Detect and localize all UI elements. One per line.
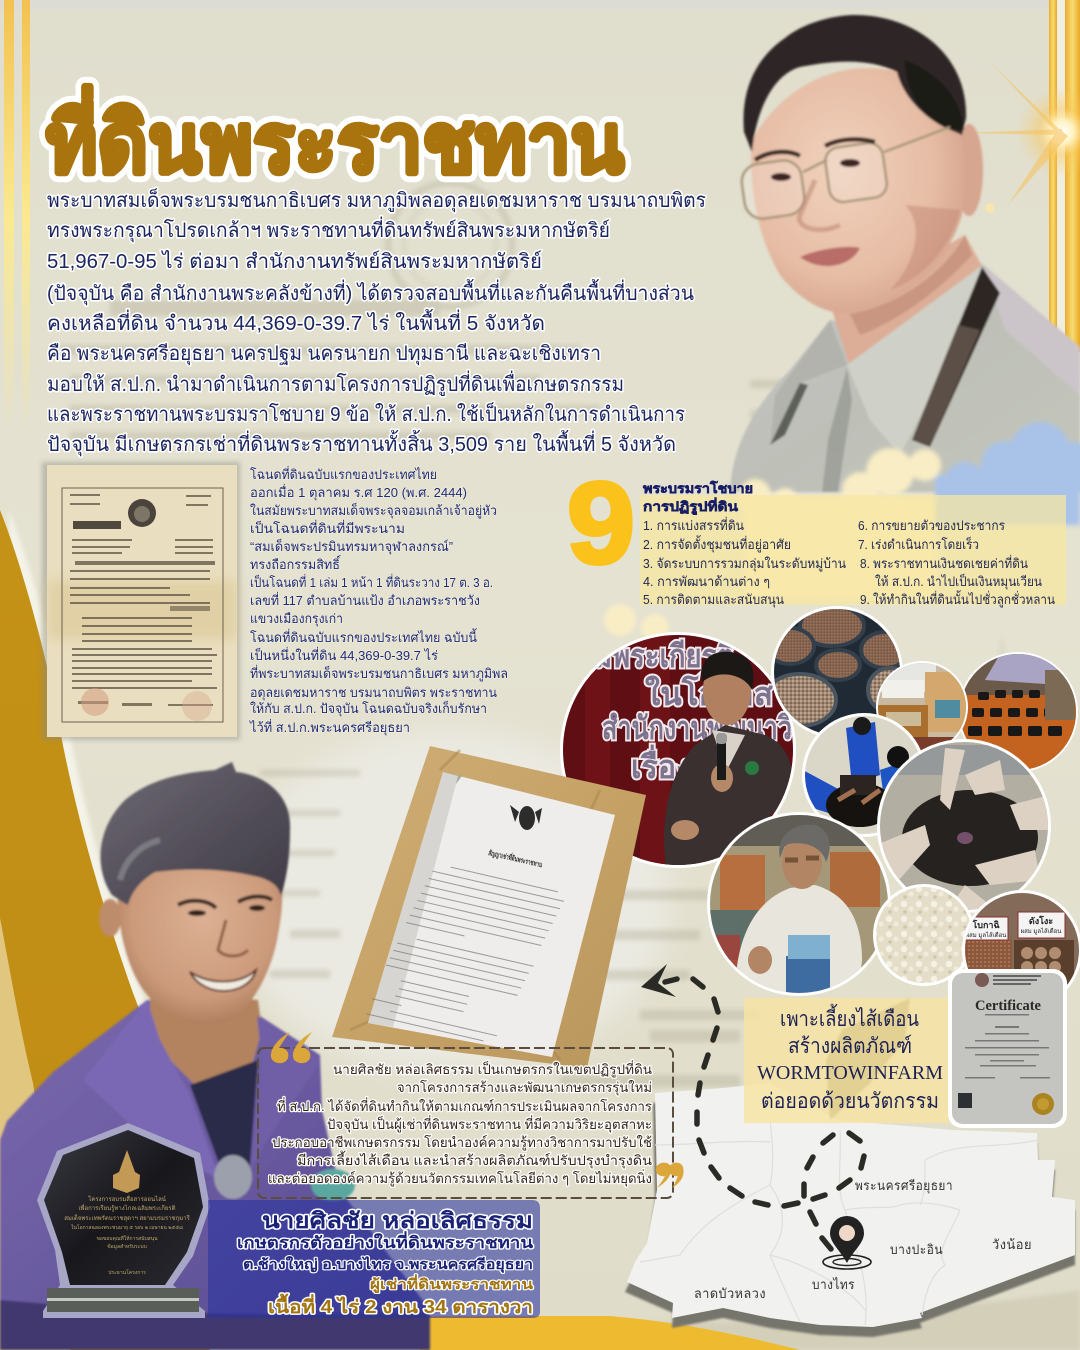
bottom right swoosh [420, 1290, 1080, 1350]
hair [101, 762, 290, 905]
nose [799, 180, 840, 230]
plaque inscription [64, 1195, 191, 1276]
intro paragraph: ทรงพระกรุณาโปรดเกล้าฯ พระราชทานที่ดินทรัพย์สินพระมหากษัตริย์ [47, 216, 610, 243]
banner text: เรื่อง [631, 744, 691, 785]
ear [99, 899, 121, 937]
photo: speaker on stage [555, 630, 805, 870]
intro paragraph: มอบให้ ส.ป.ก. นำมาดำเนินการตามโครงการปฏิรูปที่ดินเพื่อเกษตรกรรม [47, 370, 624, 397]
big number 9: 9 [567, 458, 635, 588]
gold curved swoosh bottom left [0, 510, 219, 1350]
quote text: นายศิลชัย หล่อเลิศธรรม เป็นเกษตรกรในเขตปฏิรูปที่ดิน [333, 1060, 652, 1078]
sign labels: ผสม มูลไส้เดือน [966, 931, 1006, 939]
certificate gold seal [1032, 1093, 1054, 1115]
plaque inscription: โครงการอบรมสื่อสารออนไลน์ [88, 1195, 166, 1203]
quote text: ประกอบอาชีพเกษตรกรรม โดยนำองค์ความรู้ทางวิชาการมาปรับใช้ [272, 1134, 652, 1151]
deed caption: โฉนดที่ดินฉบับแรกของประเทศไทย [250, 466, 437, 482]
inner dark v-neck [190, 1060, 258, 1180]
quote text: มีการเลี้ยงไส้เดือน และนำสร้างผลิตภัณฑ์ปรับปรุงบำรุงดิน [297, 1150, 652, 1169]
deed caption: ออกเมื่อ 1 ตุลาคม ร.ศ 120 (พ.ศ. 2444) [250, 484, 467, 501]
intro paragraph: ปัจจุบัน มีเกษตรกรเช่าที่ดินพระราชทานทั้งสิ้น 3,509 ราย ในพื้นที่ 5 จังหวัด [47, 430, 676, 457]
photo: compost bowls [771, 606, 902, 735]
plaque inscription: ข้อมูลสำหรับระบบ [107, 1243, 147, 1250]
district labels: พระนครศรีอยุธยา [855, 1178, 953, 1194]
photo: hands with worms in soil [876, 739, 1052, 915]
map: Ayutthaya districts: ลาดบัวหลวง [694, 1286, 766, 1301]
faded land document watermark [60, 183, 1004, 1087]
district borders [640, 1120, 1038, 1325]
right gold frame strips [1049, 0, 1080, 352]
title: ที่ดินพระราชทาน [46, 85, 624, 190]
deed caption: ไว้ที่ ส.ป.ก.พระนครศรีอยุธยา [249, 719, 410, 736]
role: เกษตรกรตัวอย่างในที่ดินพระราชทาน [237, 1231, 533, 1252]
shirt [0, 1000, 430, 1350]
certificate card: Certificate [975, 998, 1041, 1014]
deed lines [70, 494, 217, 706]
hair [743, 15, 966, 152]
nose [218, 920, 248, 956]
intro paragraph [47, 187, 706, 457]
deed caption: เป็นโฉนดที่ดินที่มีพระนาม [250, 519, 405, 536]
speaker body [664, 725, 793, 870]
photo: students working the soil [802, 713, 926, 837]
sign labels: ดังโงะ [1029, 915, 1053, 926]
deed heading [73, 521, 121, 529]
map shadow [625, 1093, 1075, 1337]
shirt [730, 255, 1080, 492]
closing quote mark [656, 1163, 684, 1188]
principles column one: 2. การจัดตั้งชุมชนที่อยู่อาศัย [643, 535, 791, 553]
yellow caption panel [744, 998, 949, 1123]
name: นายศิลชัย หล่อเลิศธรรม [262, 1208, 533, 1233]
panel heading [643, 480, 753, 515]
banner text: มพระเกียรติ [594, 638, 734, 674]
panel background [640, 495, 1066, 605]
panel heading: การปฏิรูปที่ดิน [643, 497, 738, 515]
deed caption: ทรงถือกรรมสิทธิ์ [250, 555, 342, 572]
banner text: ในโอกาส [645, 675, 773, 712]
badge [311, 1169, 355, 1201]
crystal award plaque [37, 1123, 210, 1318]
deed caption: อดุลยเดชมหาราช บรมนาถบพิตร พระราชทาน [250, 685, 497, 701]
intro paragraph: พระบาทสมเด็จพระบรมชนกาธิเบศร มหาภูมิพลอดุลยเดชมหาราช บรมนาถบพิตร [47, 187, 706, 213]
photo: bottled products and boxes [958, 650, 1078, 775]
sign labels [964, 912, 1065, 940]
right collar [250, 1016, 320, 1170]
principles column one: 4. การพัฒนาด้านต่าง ๆ [643, 574, 770, 589]
intro paragraph: คือ พระนครศรีอยุธยา นครปฐม นครนายก ปทุมธานี และฉะเชิงเทรา [47, 343, 601, 366]
plaque inscription: ขอขอบคุณที่ให้การสนับสนุน [96, 1235, 158, 1242]
quote text [268, 1060, 652, 1187]
left gold frame strips [4, 0, 30, 430]
shoulder shade [0, 1300, 430, 1350]
speaker hand and microphone [711, 764, 733, 792]
name banner [208, 1200, 540, 1318]
sign labels: ผสม มูลไส้เดือน [1021, 927, 1061, 935]
glasses [740, 127, 950, 221]
certificate card [948, 969, 1067, 1128]
deed caption: โฉนดที่ดินฉบับแรกของประเทศไทย ฉบับนี้ [250, 628, 478, 645]
deed caption: ในสมัยพระบาทสมเด็จพระจุลจอมเกล้าเจ้าอยู่หัว [250, 501, 497, 519]
plaque inscription: ประธานโครงการ [108, 1269, 146, 1276]
opening quote mark [271, 1032, 312, 1063]
quote text: ที่ ส.ป.ก. ได้จัดที่ดินทำกินให้ตามเกณฑ์การประเมินผลจากโครงการ [277, 1097, 652, 1114]
deed caption: ที่พระบาทสมเด็จพระบรมชนกาธิเบศร มหาภูมิพล [250, 664, 508, 682]
land area: เนื้อที่ 4 ไร่ 2 งาน 34 ตารางวา [268, 1293, 533, 1317]
deed caption: เป็นโฉนดที่ 1 เล่ม 1 หน้า 1 ที่ดินระวาง 17 ต. 3 อ. [250, 573, 493, 590]
deed caption: เลขที่ 117 ตำบลบ้านแป้ง อำเภอพระราชวัง [250, 592, 480, 608]
map: Ayutthaya districts: บางไทร [812, 1277, 855, 1292]
deed caption: “สมเด็จพระปรมินทรมหาจุฬาลงกรณ์” [250, 537, 453, 555]
banner text: สำนักงานพัฒนาวิ [602, 710, 792, 746]
intro paragraph: 51,967-0-95 ไร่ ต่อมา สำนักงานทรัพย์สินพระมหากษัตริย์ [47, 250, 542, 273]
principles column two [858, 518, 1055, 608]
strap [912, 267, 1000, 447]
right collar [847, 267, 990, 455]
document body lines [366, 856, 566, 1052]
deed caption [249, 466, 508, 736]
yellow caption panel: ต่อยอดด้วยนวัตกรรม [761, 1090, 939, 1113]
neck [832, 235, 982, 368]
intro paragraph: คงเหลือที่ดิน จำนวน 44,369-0-39.7 ไร่ ในพื้นที่ 5 จังหวัด [47, 309, 545, 335]
address: ต.ช้างใหญ่ อ.บางไทร จ.พระนครศรีอยุธยา [243, 1255, 533, 1273]
map: Ayutthaya districts [625, 1083, 1075, 1337]
pendant [214, 1155, 252, 1199]
banner text [594, 638, 792, 785]
eyes and brows [178, 896, 272, 916]
photo: white fungal culture [873, 884, 975, 986]
light flare star [965, 62, 1080, 213]
quote text: จากโครงการสร้างและพัฒนาเกษตรกรรุ่นใหม่ [397, 1079, 652, 1096]
photo: farmer holding worm product [707, 812, 891, 998]
quote text: ปัจจุบัน เป็นผู้เช่าที่ดินพระราชทาน ที่มีความวิริยะอุตสาหะ [327, 1115, 652, 1133]
first land title deed document [42, 462, 240, 740]
neck [150, 990, 262, 1090]
ear [955, 124, 983, 216]
deed caption: เป็นหนึ่งในที่ดิน 44,369-0-39.7 ไร่ [250, 646, 438, 663]
plaque emblem [113, 1150, 140, 1193]
face [751, 68, 965, 313]
principles column two: 7. เร่งดำเนินการโดยเร็ว [858, 535, 979, 552]
quote text: และต่อยอดองค์ความรู้ด้วยนวัตกรรมเทคโนโลยีต่าง ๆ โดยไม่หยุดนิ่ง [268, 1169, 652, 1187]
dashed route arrow [641, 964, 864, 1249]
principles column one: 1. การแบ่งสรรที่ดิน [643, 517, 744, 533]
deed caption: แขวงเมืองกรุงเก่า [250, 611, 343, 627]
principles column two: 6. การขยายตัวของประชากร [858, 518, 1005, 533]
map: Ayutthaya districts: บางปะอิน [890, 1242, 943, 1257]
face [117, 840, 282, 1024]
principles column two: ให้ ส.ป.ก. นำไปเป็นเงินหมุนเวียน [875, 572, 1042, 590]
portrait: farmer Silachai [0, 762, 430, 1350]
smile [190, 970, 256, 991]
left collar [770, 320, 847, 445]
framed royal land lease document [332, 746, 646, 1068]
document heading: สัญญาเช่าที่ดินพระราชทาน [488, 846, 544, 869]
lips [800, 247, 860, 266]
principles column one [643, 517, 846, 608]
map land [627, 1083, 1075, 1327]
deed seal [128, 499, 156, 527]
tenant label: ผู้เช่าที่ดินพระราชทาน [370, 1274, 534, 1293]
map location pin [823, 1216, 871, 1269]
intro paragraph: และพระราชทานพระบรมราโชบาย 9 ข้อ ให้ ส.ป.ก. ใช้เป็นหลักในการดำเนินการ [47, 401, 685, 426]
yellow caption panel: สร้างผลิตภัณฑ์ [788, 1034, 912, 1058]
quote box [258, 1032, 684, 1198]
panel: nine royal land reform principles [567, 458, 1066, 608]
deed caption: ให้กับ ส.ป.ก. ปัจจุบัน โฉนดฉบับจริงเก็บรักษา [250, 699, 487, 717]
principles column two: 8. พระราชทานเงินชดเชยค่าที่ดิน [860, 555, 1028, 571]
panel heading: พระบรมราโชบาย [643, 480, 753, 496]
portrait: King Bhumibol illustration [730, 15, 1080, 492]
intro paragraph: (ปัจจุบัน คือ สำนักงานพระคลังข้างที่) ได้ตรวจสอบพื้นที่และกันคืนพื้นที่บางส่วน [47, 279, 694, 306]
yellow caption panel: เพาะเลี้ยงไส้เดือน [780, 1004, 919, 1031]
photo: jars on table [876, 661, 968, 757]
principles column two: 9. ให้ทำกินในที่ดินนั้นไปชั่วลูกชั่วหลาน [860, 590, 1055, 608]
plaque inscription: สมเด็จพระเทพรัตนราชสุดาฯ สยามบรมราชกุมารี [64, 1213, 191, 1222]
clouds [604, 422, 1080, 642]
eyes and brows [755, 139, 875, 181]
garuda emblem [510, 805, 542, 830]
map: Ayutthaya districts: วังน้อย [992, 1237, 1032, 1252]
plaque inscription: เพื่อการเรียนรู้ทางไกลเฉลิมพระเกียรติ [78, 1204, 176, 1212]
plaque inscription: ในโอกาสฉลองพระชนมายุ ๕ รอบ ๒ เมษายน ๒๕๕๘ [71, 1224, 183, 1231]
photo: packaged soil products with signs [962, 890, 1080, 990]
left collar [83, 1000, 220, 1180]
certificate qr code [958, 1093, 972, 1108]
sign labels: โบกาฉิ [971, 919, 1000, 930]
yellow caption panel: WORMTOWINFARM [757, 1062, 943, 1084]
principles column one: 5. การติดตามและสนับสนุน [643, 592, 784, 608]
farmer body [735, 885, 862, 996]
deed red stamps [81, 688, 109, 716]
title: ที่ดินพระราชทาน [46, 85, 624, 190]
principles column one: 3. จัดระบบการรวมกลุ่มในระดับหมู่บ้าน [643, 556, 846, 572]
